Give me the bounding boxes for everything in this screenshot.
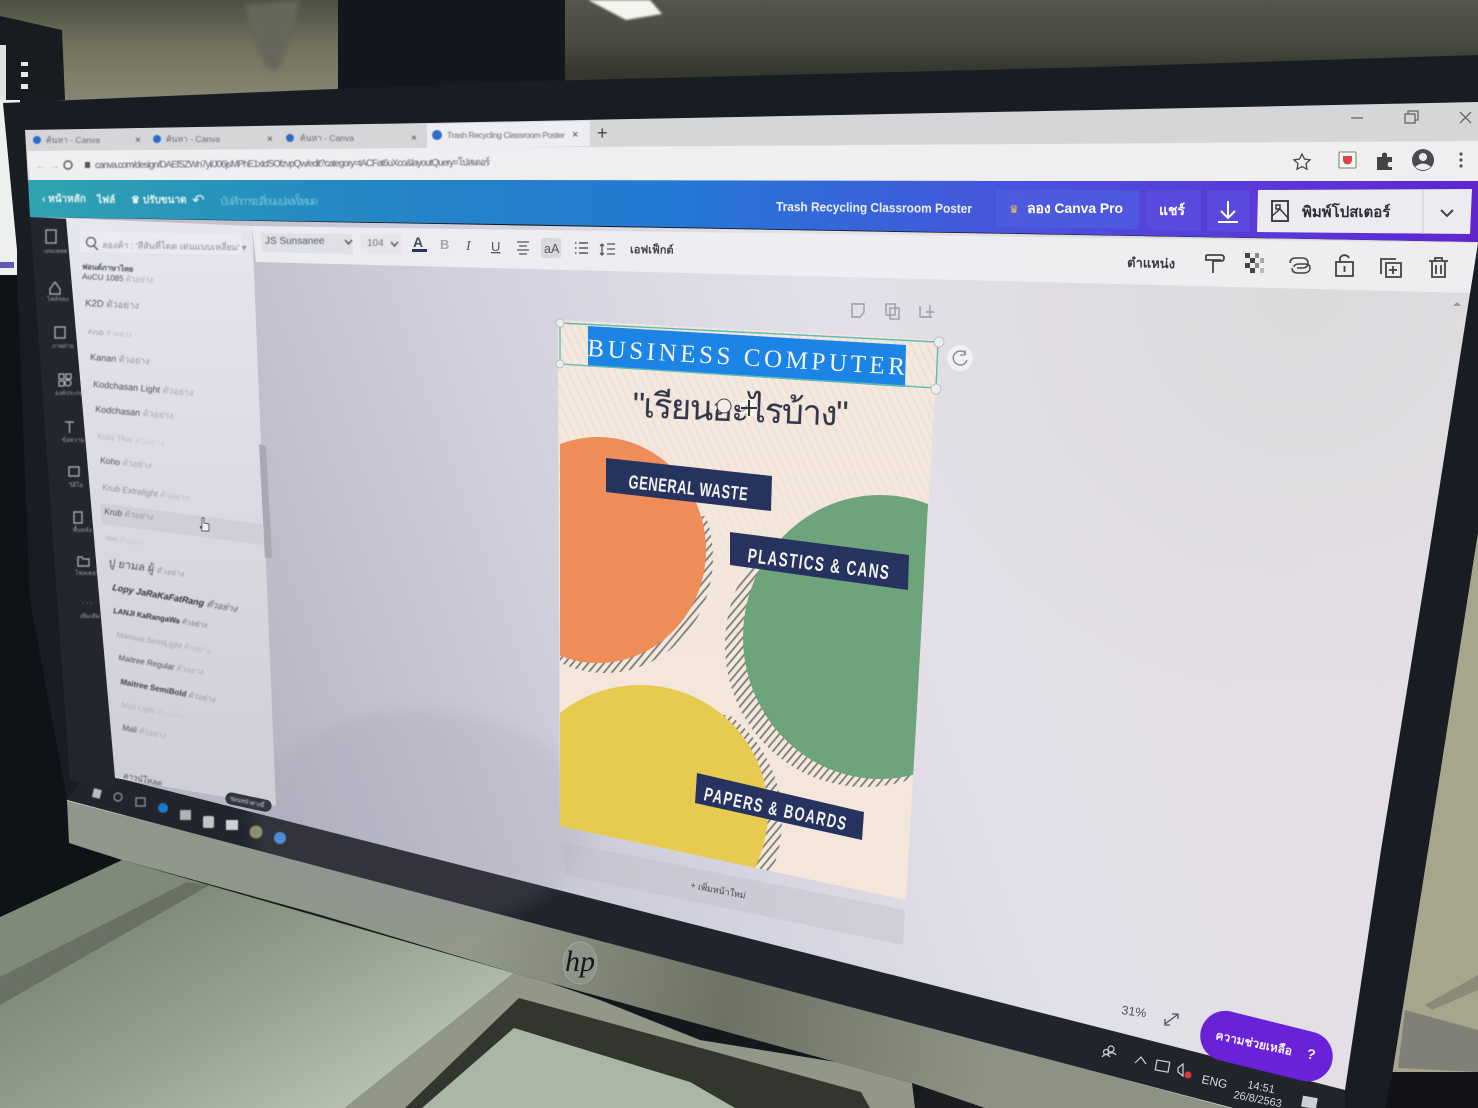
yellow circle with hatched shadow <box>560 685 782 870</box>
text formatting toolbar: JS Sunsanee <box>265 236 325 247</box>
text formatting toolbar: U <box>491 239 500 254</box>
share button <box>1147 190 1201 231</box>
browser icons <box>1294 149 1463 171</box>
orange circle with hatched shadow <box>560 437 713 673</box>
help button <box>1195 1006 1338 1087</box>
font panel <box>66 218 276 813</box>
left icon sidebar: โฟลเดอร์ <box>75 569 100 577</box>
move cursor <box>717 399 758 417</box>
left icon sidebar: ภาพถ่าย <box>52 343 74 350</box>
left icon sidebar <box>30 217 118 790</box>
thai heading: "เรียนอะไรบ้าง" <box>632 385 849 434</box>
left icon sidebar: ไฟล์ของ <box>46 295 69 303</box>
font list: Lopy JaRaKaFatRang ตัวอย่าง <box>112 582 240 614</box>
design title: Trash Recycling Classroom Poster <box>776 199 972 216</box>
label: general waste <box>606 458 772 511</box>
poster <box>558 320 937 900</box>
font list: Kodchasan Light ตัวอย่าง <box>93 379 194 398</box>
label: papers and boards <box>695 773 864 840</box>
position and object tools <box>1127 253 1448 277</box>
font list: ปู ยามล ผู้ ตัวอย่าง <box>108 557 185 580</box>
screen: editor canvas background <box>30 217 1478 1090</box>
system tray <box>1102 1046 1318 1108</box>
font list: Kanan ตัวอย่าง <box>90 352 150 366</box>
top navigation bar <box>28 180 1478 242</box>
window controls <box>1351 111 1471 123</box>
tabs: × <box>572 129 578 141</box>
help button: ความช่วยเหลือ <box>1214 1028 1293 1058</box>
download button <box>1207 190 1250 232</box>
font list: Krub ตัวอย่าง <box>88 327 133 339</box>
font list: Kodchasan ตัวอย่าง <box>95 404 174 421</box>
top navigation bar: ♛ ปรับขนาด <box>131 194 187 206</box>
print poster button <box>1257 189 1472 234</box>
text formatting toolbar: เอฟเฟ็กต์ <box>630 242 674 257</box>
upgrade button: ♛ <box>1009 204 1019 216</box>
hp logo <box>563 942 597 984</box>
upgrade button: ลอง Canva Pro <box>1027 200 1123 216</box>
screen: browser tab strip and address bar: + <box>597 123 608 143</box>
system tray: 14:51 <box>1246 1079 1276 1096</box>
label: general waste: GENERAL WASTE <box>628 472 749 505</box>
font list: Itim ตัวอย่าง <box>106 534 144 547</box>
tabs: ค้นหา - Canva <box>300 133 354 143</box>
hide panel pill <box>224 791 273 813</box>
tabs: × <box>135 135 141 146</box>
tabs: Trash Recycling Classroom Poster <box>447 130 565 140</box>
hand cursor <box>200 518 209 531</box>
text formatting toolbar: B <box>440 237 449 252</box>
tabs: × <box>411 133 417 144</box>
desk and monitor stand <box>0 275 1000 1108</box>
text formatting toolbar: A <box>413 234 423 250</box>
left icon sidebar: พื้นหลัง <box>73 524 92 534</box>
font list: Mali ตัวอย่าง <box>122 723 167 740</box>
scrollbar arrow <box>1453 302 1461 306</box>
text formatting toolbar <box>252 226 1478 293</box>
left icon sidebar: องค์ประกอบ <box>55 389 87 397</box>
left icon sidebar: วิดีโอ <box>68 481 83 489</box>
font list: Maitree SemiBold ตัวอย่าง <box>120 677 217 704</box>
font list: Kohi Thai ตัวอย่าง <box>97 431 165 448</box>
font list: LANJI KaRangaWa ตัวอย่าง <box>113 606 208 630</box>
position and object tools: ตำแหน่ง <box>1127 255 1175 271</box>
tabs: ค้นหา - Canva <box>166 134 220 144</box>
hide panel pill: ซ่อนหน้าต่างนี้ <box>230 794 266 809</box>
taskbar left icons <box>92 788 286 844</box>
text formatting toolbar: 104 <box>367 238 384 249</box>
left icon sidebar: เทมเพลต <box>44 248 68 255</box>
zoom level: 31% <box>1121 1003 1147 1020</box>
poster page tools <box>852 304 934 319</box>
font list: Krub Extralight ตัวอย่าง <box>102 482 190 503</box>
zoom level <box>1121 1003 1178 1025</box>
hover row <box>100 503 264 545</box>
font search box: ลองค้า : 'สีสันที่โดด เด่นแบบเหลี่ยม' ▾ <box>102 238 247 253</box>
tabs: × <box>267 134 273 145</box>
top navigation bar: ↶ <box>192 192 205 209</box>
rotate handle <box>947 345 973 371</box>
tabs: ค้นหา - Canva <box>46 135 100 145</box>
title text selection <box>556 319 944 394</box>
font list: Krub ตัวอย่าง <box>104 506 154 522</box>
upgrade button <box>996 190 1139 229</box>
font list: AuCU 1085 ตัวอย่าง <box>82 272 154 285</box>
help button: ? <box>1305 1045 1317 1063</box>
font list: Maitree Regular ตัวอย่าง <box>118 653 205 677</box>
font list: K2D ตัวอย่าง <box>85 298 139 312</box>
left icon sidebar: ข้อความ <box>62 437 84 444</box>
silver monitor bar <box>67 800 1233 1108</box>
font list: Mali Light ตัวอย่าง <box>121 700 185 721</box>
font list: Koho ตัวอย่าง <box>100 455 152 470</box>
tabs <box>33 129 578 146</box>
top navigation bar: ‹ หน้าหลัก <box>42 193 86 205</box>
label: papers and boards: PAPERS & BOARDS <box>702 784 848 835</box>
top navigation bar: บันทึกการเปลี่ยนแปลงทั้งหมด <box>220 193 318 208</box>
address bar: ← → <box>35 160 60 172</box>
share button: แชร์ <box>1159 202 1186 218</box>
system tray: ENG <box>1200 1072 1229 1091</box>
add new page button: + เพิ่มหน้าใหม่ <box>690 878 747 901</box>
screen: browser tab strip and address bar <box>25 102 1478 185</box>
font list <box>82 261 240 788</box>
left icon sidebar: เพิ่มเติม <box>80 612 100 620</box>
title text selection: BUSINESS COMPUTER <box>587 335 906 381</box>
green circle with hatched shadow <box>725 495 928 787</box>
address bar: canva.com/design/DAEfSZWn7yl/J06jsMPhE1xIdSOfzvpQw/edit?category=tACFat6uXco&layoutQuery=โปสเตอร์ <box>95 156 490 171</box>
hp logo: hp <box>565 945 595 978</box>
scrollbar <box>259 444 272 558</box>
font list: ฟอนต์ภาษาไทย <box>82 261 134 274</box>
taskbar <box>67 770 1345 1108</box>
top navigation bar: ไฟล์ <box>96 193 115 206</box>
label: plastics and cans: PLASTICS & CANS <box>746 545 890 584</box>
text formatting toolbar: I <box>465 239 472 254</box>
add new page button <box>562 842 905 945</box>
font list: Mamuai SemiLight ตัวอย่าง <box>116 630 212 656</box>
text formatting toolbar: aA <box>544 242 560 256</box>
print poster button: พิมพ์โปสเตอร์ <box>1302 202 1391 221</box>
label: plastics and cans <box>730 532 909 590</box>
font list: ดาวน์โหลด <box>123 770 163 788</box>
